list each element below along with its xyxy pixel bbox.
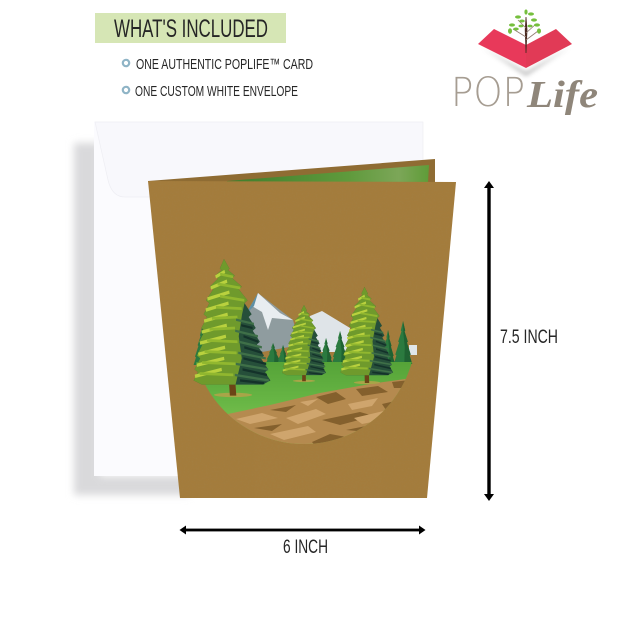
height arrow — [484, 181, 494, 501]
back cover — [148, 159, 435, 182]
envelope body — [94, 122, 423, 476]
front cover — [148, 181, 456, 498]
kraft texture — [148, 181, 456, 498]
list item: card: ONE AUTHENTIC POPLIFE™ CARD — [136, 56, 313, 73]
list item: card — [123, 56, 313, 73]
wordmark: Life: Life — [526, 74, 598, 116]
list item: envelope: ONE CUSTOM WHITE ENVELOPE — [135, 83, 298, 100]
wordmark: POP: POP — [451, 70, 525, 116]
list item: envelope — [123, 83, 298, 100]
icon: open red book — [478, 29, 572, 68]
mountains — [240, 293, 350, 352]
header: what's included — [95, 13, 313, 100]
sky sliver — [409, 345, 417, 355]
logo shadow — [482, 47, 570, 76]
envelope — [74, 122, 423, 495]
greeting card — [148, 159, 456, 498]
meadow — [196, 362, 412, 444]
tree: centre pine — [282, 305, 326, 382]
inner green page — [227, 165, 429, 182]
tree: large left pine — [186, 259, 272, 397]
envelope flap — [95, 122, 423, 197]
icon: tree — [508, 9, 541, 53]
width arrow — [180, 526, 426, 534]
heading text: WHAT'S INCLUDED — [114, 15, 268, 43]
width label: 6 INCH — [283, 537, 328, 558]
height label: 7.5 INCH — [500, 327, 558, 348]
logo: Pop Life — [451, 9, 598, 116]
heading band — [95, 13, 286, 43]
forest scene cutout — [186, 259, 420, 452]
dirt path — [228, 379, 406, 444]
background firs — [194, 321, 412, 365]
tree: right pine — [338, 287, 393, 384]
envelope shadow — [74, 143, 190, 495]
